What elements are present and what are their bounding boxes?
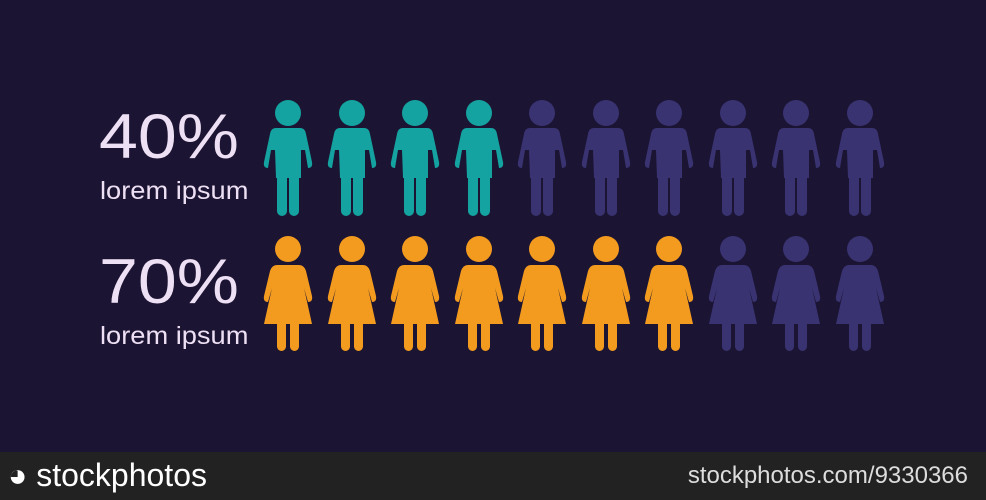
- heading: 70%: 70%: [99, 247, 239, 317]
- footer bar: [0, 452, 986, 500]
- footer id: stockphotos.com/9330366: [688, 462, 968, 489]
- text: lorem ipsum 1: lorem ipsum: [100, 177, 248, 205]
- footer logo: ◕ stockphotos: [8, 457, 207, 493]
- text: lorem ipsum 2: lorem ipsum: [100, 322, 248, 350]
- heading: 40%: 40%: [99, 102, 239, 172]
